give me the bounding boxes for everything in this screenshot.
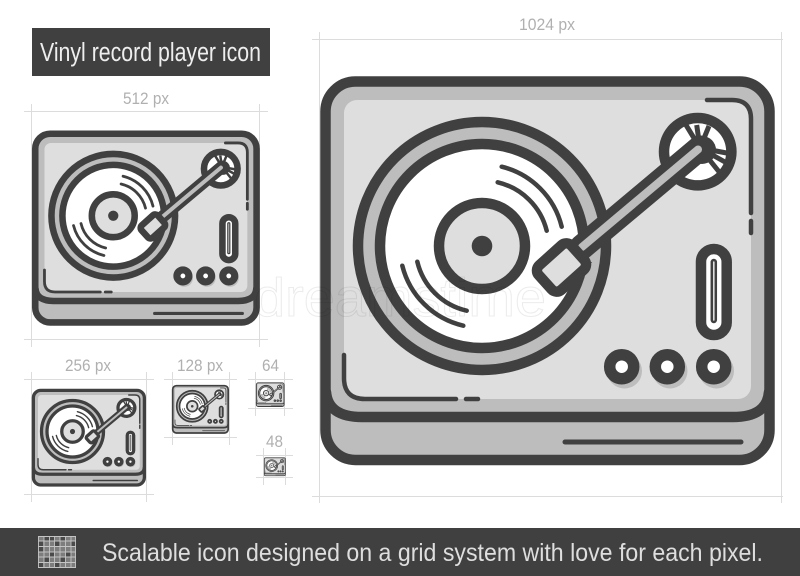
footer text: Scalable icon designed on a grid system with love for each pixel.: [102, 539, 763, 567]
icon: 512 px record player: [35, 134, 257, 322]
label: 48: 48: [266, 432, 283, 451]
size guide: 48 px: [256, 448, 293, 485]
label: 256 px: 256 px: [65, 356, 111, 375]
icon: large vinyl record player: [326, 82, 770, 460]
label: 128 px: 128 px: [177, 356, 223, 375]
label: 64: 64: [262, 356, 279, 375]
icon: pixel grid: [38, 536, 76, 568]
size guide: 64 px: [248, 372, 293, 416]
icon: 48 px record player: [264, 458, 285, 476]
watermark: dreamstime: [254, 268, 546, 328]
title: [32, 28, 270, 76]
label: 512 px: 512 px: [123, 89, 169, 108]
label: 1024 px: 1024 px: [519, 16, 576, 34]
size guide: 256 px: [24, 372, 154, 502]
title: Vinyl record player icon: [40, 39, 261, 67]
footer bar: [0, 528, 800, 576]
icon: 128 px record player: [173, 386, 228, 433]
icon: 256 px record player: [33, 390, 144, 485]
icon: 64 px record player: [256, 383, 284, 406]
size guide: 128 px: [164, 372, 237, 445]
size guide: 512 px: [24, 104, 268, 347]
size guide: 1024 px: [312, 32, 783, 503]
